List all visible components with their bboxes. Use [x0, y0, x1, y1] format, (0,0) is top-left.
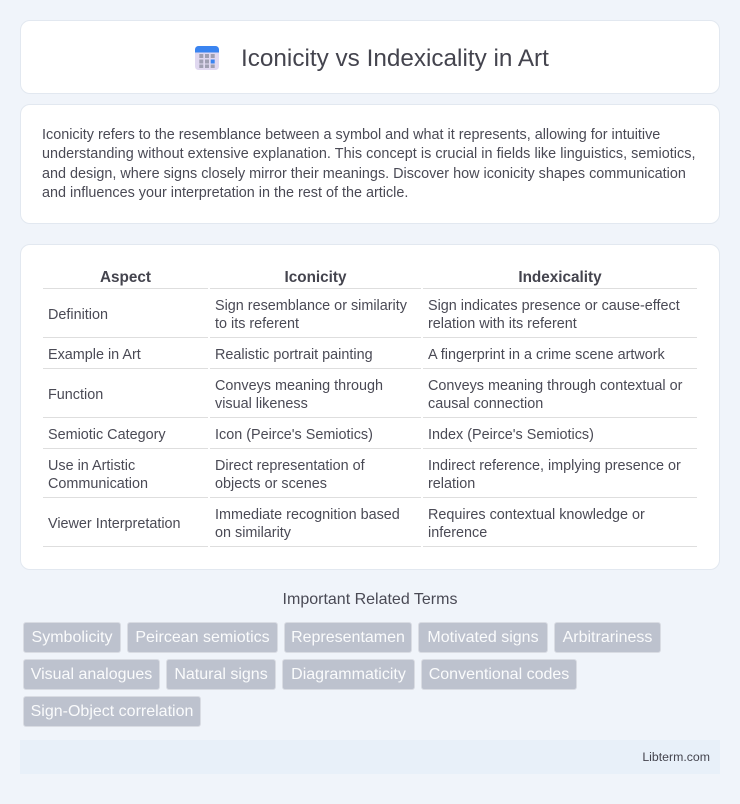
tag	[284, 622, 412, 653]
tag	[421, 659, 577, 690]
row: Viewer Interpretation: on similarity	[215, 525, 291, 541]
row: Semiotic Category: Index (Peirce's Semiotics)	[428, 427, 594, 443]
row: Viewer Interpretation: inference	[428, 525, 487, 541]
row: Use in Artistic Communication: Direct representation of	[215, 458, 365, 474]
tag: Natural signs	[174, 666, 268, 683]
tag	[282, 659, 415, 690]
tag: Conventional codes	[429, 666, 569, 683]
row: Viewer Interpretation: Requires contextual knowledge or	[428, 507, 645, 523]
row: Semiotic Category: Semiotic Category	[48, 427, 166, 443]
comparison table card	[20, 244, 720, 570]
tag	[23, 696, 201, 727]
related terms tags	[23, 622, 661, 727]
intro card	[20, 104, 720, 224]
table header: Indexicality: Indexicality	[518, 269, 602, 286]
tag	[166, 659, 276, 690]
row: Viewer Interpretation: Viewer Interpretation	[48, 516, 181, 532]
row: Use in Artistic Communication: objects or scenes	[215, 476, 327, 492]
header card	[20, 20, 720, 94]
row: Function: Conveys meaning through	[215, 378, 383, 394]
table header: Aspect: Aspect	[100, 269, 151, 286]
tag: Visual analogues	[31, 666, 152, 683]
row: Use in Artistic Communication: relation	[428, 476, 475, 492]
row: Viewer Interpretation: Immediate recognition based	[215, 507, 400, 523]
related terms heading: Important Related Terms	[283, 591, 457, 608]
intro text: understanding without extensive explanation. This concept is crucial in fields like linguistics, semiotics,	[42, 146, 696, 162]
row: Use in Artistic Communication	[48, 458, 681, 492]
tag: Arbitrariness	[563, 629, 652, 646]
row: Definition: to its referent	[215, 316, 299, 332]
tag	[23, 659, 160, 690]
footer credit: Libterm.com	[642, 750, 710, 764]
row: Use in Artistic Communication: Use in Artistic	[48, 458, 135, 474]
tag: Representamen	[291, 629, 405, 646]
row: Function: Function	[48, 387, 103, 403]
tag: Symbolicity	[32, 629, 112, 646]
row: Example in Art: Example in Art	[48, 347, 141, 363]
row: Definition: Definition	[48, 307, 108, 323]
icon: calendar	[195, 46, 219, 70]
tag: Diagrammaticity	[291, 666, 406, 683]
row: Definition: Sign indicates presence or cause-effect	[428, 298, 680, 314]
row: Viewer Interpretation	[48, 507, 645, 541]
row: Function	[48, 378, 682, 412]
intro text: and influences your interpretation in the rest of the article.	[42, 185, 408, 201]
intro text	[42, 127, 696, 201]
row: Example in Art	[48, 347, 665, 363]
tag	[127, 622, 278, 653]
tag	[554, 622, 661, 653]
footer bar	[20, 740, 720, 774]
tag	[418, 622, 548, 653]
row: Function: Conveys meaning through contextual or	[428, 378, 682, 394]
title: Iconicity vs Indexicality in Art	[241, 45, 549, 72]
row: Semiotic Category	[48, 427, 594, 443]
tag	[23, 622, 121, 653]
row: Use in Artistic Communication: Communication	[48, 476, 148, 492]
tag: Peircean semiotics	[135, 629, 270, 646]
row: Example in Art: Realistic portrait painting	[215, 347, 373, 363]
row: Definition	[48, 298, 680, 332]
intro text: and design, where signs closely mirror their meanings. Discover how iconicity shapes communication	[42, 166, 686, 182]
tag: Sign-Object correlation	[31, 703, 193, 720]
tag: Motivated signs	[427, 629, 539, 646]
row: Use in Artistic Communication: Indirect reference, implying presence or	[428, 458, 681, 474]
row: Semiotic Category: Icon (Peirce's Semiotics)	[215, 427, 373, 443]
table header: Iconicity: Iconicity	[284, 269, 347, 286]
row: Definition: Sign resemblance or similarity	[215, 298, 407, 314]
row: Example in Art: A fingerprint in a crime scene artwork	[428, 347, 665, 363]
row: Function: causal connection	[428, 396, 543, 412]
row: Function: visual likeness	[215, 396, 308, 412]
intro text: Iconicity refers to the resemblance between a symbol and what it represents, allowing for intuitive	[42, 127, 660, 143]
row: Definition: relation with its referent	[428, 316, 577, 332]
